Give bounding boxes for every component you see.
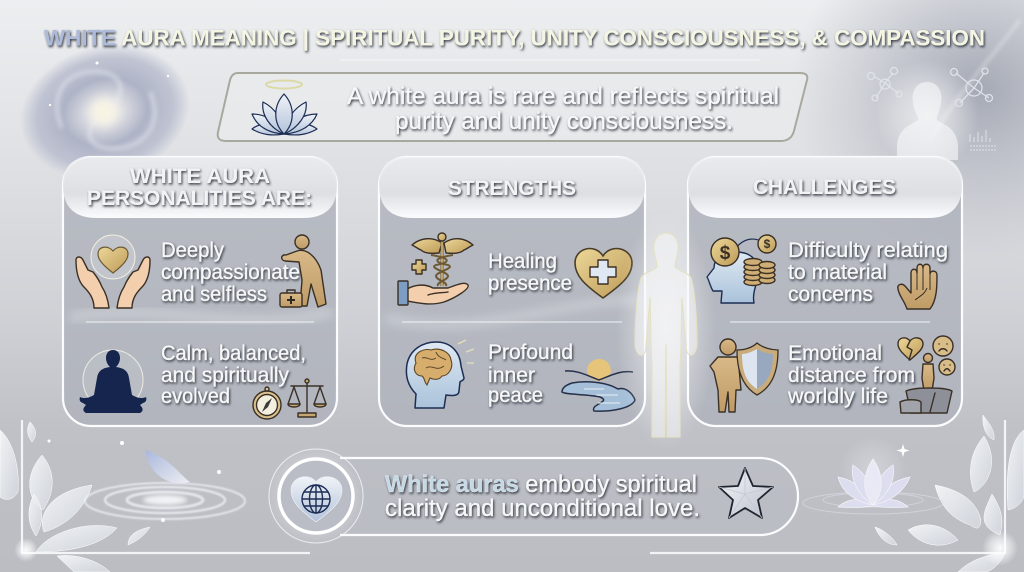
heading: PERSONALITIES ARE: — [87, 187, 312, 210]
text: closing statement — [385, 471, 700, 522]
text: statement: purity and unity consciousness. — [395, 108, 733, 135]
panel: white aura personalities — [63, 157, 337, 426]
icon: head with brain — [406, 340, 474, 408]
icon: head with coins: $ — [720, 243, 731, 264]
callout: top statement — [218, 73, 807, 141]
frame lines and corner foliage — [0, 415, 1024, 572]
text: difficulty — [788, 239, 948, 306]
icon: silver star — [719, 468, 773, 518]
text: compassionate: compassionate — [161, 261, 300, 284]
text: emotional distance: distance from — [788, 364, 915, 387]
text: compassionate: Deeply — [161, 239, 224, 262]
icon: meditation figure — [80, 350, 146, 413]
text: compassionate — [161, 239, 300, 306]
text: closing statement: White auras embody spiritual — [385, 471, 697, 498]
title: WHITE AURA MEANING | SPIRITUAL PURITY, UNITY CONSCIOUSNESS, & COMPASSION — [44, 26, 985, 50]
icon: hands holding heart — [76, 235, 150, 308]
text: emotional distance — [787, 342, 915, 408]
text: difficulty: concerns — [788, 283, 873, 306]
text: difficulty: Difficulty relating — [788, 239, 948, 262]
icon: head with coins: $ — [764, 237, 771, 251]
icon: water ripples and feather — [48, 440, 245, 522]
text: emotional distance: Emotional — [788, 342, 882, 365]
text: healing: Healing — [488, 250, 557, 273]
panel: challenges — [688, 157, 962, 426]
callout: bottom statement — [266, 446, 798, 546]
text: compassionate: and selfless — [161, 283, 267, 306]
icon: person with shield — [710, 339, 778, 412]
text: emotional distance: worldly life — [787, 385, 888, 408]
icon: lotus with halo — [252, 80, 317, 135]
icon: lotus on water — [803, 436, 943, 514]
text: difficulty: to material — [788, 261, 887, 284]
icon: sun over water — [562, 359, 635, 411]
icon: heart with cross — [575, 249, 632, 298]
icon: head with coins — [707, 235, 776, 303]
icon: compass — [253, 387, 281, 419]
text: inner peace — [488, 341, 573, 407]
heading — [87, 165, 312, 210]
text: calm — [161, 342, 306, 408]
text: healing: presence — [488, 272, 572, 295]
icon: caduceus over hand — [398, 233, 473, 305]
text: statement: A white aura is rare and reflects spiritual — [347, 83, 779, 110]
heading: STRENGTHS — [448, 177, 576, 200]
icon: radiant figure with molecules — [868, 60, 996, 170]
text: calm: Calm, balanced, — [161, 342, 306, 365]
panel: strengths — [379, 157, 645, 426]
icon: heart with globe — [266, 446, 366, 546]
heading: WHITE AURA — [130, 165, 270, 188]
text: healing — [488, 250, 572, 295]
text: inner peace: Profound — [488, 341, 573, 364]
icon: stop hand — [898, 264, 937, 309]
icon: helper with first-aid kit — [280, 235, 326, 307]
text: statement — [347, 83, 779, 135]
text: calm: evolved — [161, 385, 230, 408]
text: closing statement: clarity and unconditional love. — [385, 495, 700, 522]
text: inner peace: peace — [488, 384, 543, 407]
text: inner peace: inner — [488, 364, 535, 387]
icon: isolation on rock — [898, 336, 955, 413]
icon: balance scales — [288, 379, 326, 417]
icon: galaxy — [5, 26, 205, 198]
figure: glowing human silhouette — [616, 210, 716, 450]
heading: CHALLENGES — [753, 176, 896, 199]
text: calm: and spiritually — [161, 364, 289, 387]
